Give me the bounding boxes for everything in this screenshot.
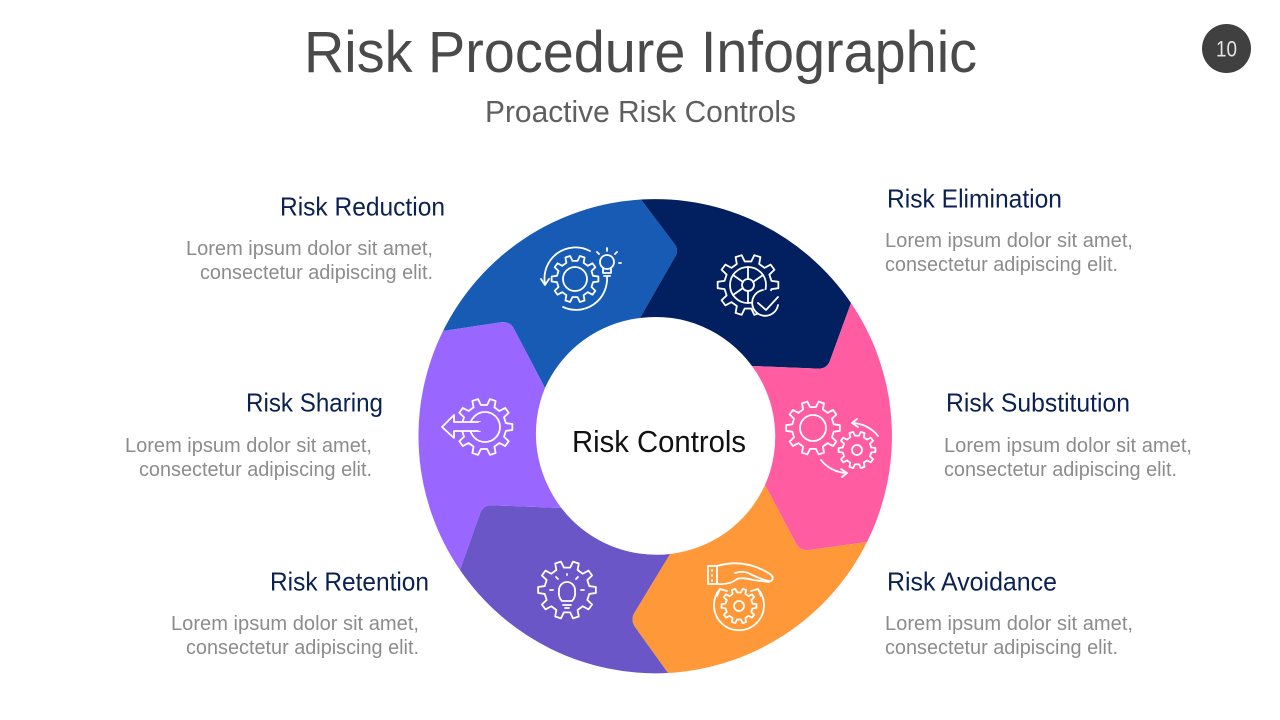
icon: gear with outgoing arrow xyxy=(442,399,512,455)
text block: risk avoidance: Risk Avoidance xyxy=(887,566,1057,596)
center hub xyxy=(537,318,774,554)
page number badge: 10 xyxy=(1216,36,1237,62)
icon: hand over gear xyxy=(708,563,773,630)
text block: risk sharing: consectetur adipiscing elit. xyxy=(139,459,372,481)
page number badge xyxy=(1202,24,1251,73)
donut ring xyxy=(418,199,892,673)
segment: risk elimination xyxy=(640,199,851,369)
icon: gear with check mark xyxy=(718,255,779,316)
text block: risk reduction xyxy=(186,192,445,284)
subtitle: Proactive Risk Controls xyxy=(485,94,796,129)
text block: risk sharing: Risk Sharing xyxy=(246,388,383,418)
text block: risk avoidance: consectetur adipiscing elit. xyxy=(885,637,1118,659)
segment: risk retention xyxy=(460,505,670,673)
text block: risk elimination xyxy=(885,184,1133,276)
text block: risk substitution: Lorem ipsum dolor sit amet, xyxy=(944,435,1192,457)
text block: risk sharing xyxy=(125,388,383,481)
text block: risk elimination: Risk Elimination xyxy=(887,184,1062,214)
text block: risk reduction: Lorem ipsum dolor sit amet, xyxy=(186,238,433,260)
text block: risk elimination: Lorem ipsum dolor sit amet, xyxy=(885,230,1133,252)
text block: risk substitution: consectetur adipiscing elit. xyxy=(944,459,1177,481)
text block: risk retention: Lorem ipsum dolor sit amet, xyxy=(171,613,419,635)
text block: risk retention: Risk Retention xyxy=(270,566,429,596)
icon: gear with idea bulb xyxy=(541,247,621,310)
text block: risk avoidance xyxy=(885,566,1133,659)
text block: risk sharing: Lorem ipsum dolor sit amet, xyxy=(125,435,372,457)
segment: risk avoidance xyxy=(632,485,867,673)
segment: risk substitution xyxy=(752,303,892,550)
segment: risk reduction xyxy=(443,200,677,388)
text block: risk elimination: consectetur adipiscing elit. xyxy=(885,254,1118,276)
text block: risk substitution xyxy=(944,388,1192,481)
text block: risk retention xyxy=(171,566,429,659)
icon: gear with light bulb xyxy=(538,562,596,618)
text block: risk reduction: Risk Reduction xyxy=(280,192,445,222)
center hub: Risk Controls xyxy=(572,424,746,459)
segment: risk sharing xyxy=(418,322,562,570)
text block: risk substitution: Risk Substitution xyxy=(946,388,1130,418)
text block: risk reduction: consectetur adipiscing elit. xyxy=(200,262,433,284)
icon: two gears with cycle arrows xyxy=(786,402,878,477)
text block: risk avoidance: Lorem ipsum dolor sit amet, xyxy=(885,613,1133,635)
title: Risk Procedure Infographic xyxy=(304,20,977,85)
text block: risk retention: consectetur adipiscing elit. xyxy=(186,637,419,659)
